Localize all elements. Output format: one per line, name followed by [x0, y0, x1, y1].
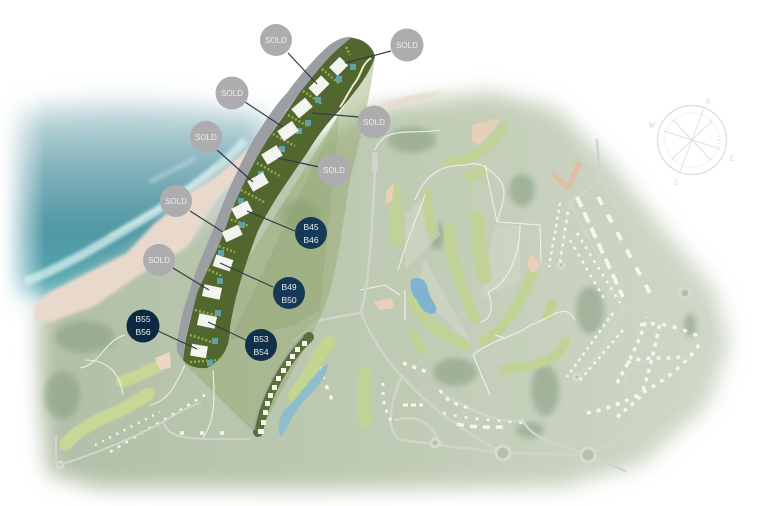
callout: B45 B46 [295, 217, 327, 249]
callout: SOLD 4: SOLD [363, 118, 385, 127]
callout leader lines [158, 51, 391, 349]
lower fairway and lake [280, 342, 329, 434]
beach north of the strip [365, 92, 445, 114]
callout: SOLD 6: SOLD [323, 166, 345, 175]
roads [56, 403, 250, 465]
cart paths [360, 130, 575, 395]
villas [190, 57, 348, 358]
icon: compass rose: E [729, 154, 735, 163]
villas [95, 197, 700, 452]
surf foam [25, 140, 245, 282]
callout: SOLD 4 [358, 106, 390, 138]
callout: B49 B50: B50 [281, 295, 297, 305]
sand bunkers [374, 118, 539, 310]
icon: compass rose: W [649, 121, 657, 130]
callout: SOLD 8: SOLD [148, 256, 170, 265]
callout: SOLD 7: SOLD [165, 197, 187, 206]
callout: SOLD 2: SOLD [396, 41, 418, 50]
roundabouts [57, 262, 690, 468]
callout: B55 B56: B56 [135, 327, 151, 337]
strip road [254, 336, 303, 430]
fairways [66, 367, 158, 444]
ocean [0, 90, 270, 310]
tree clusters [44, 127, 696, 438]
callout: SOLD 1 [260, 24, 292, 56]
dark green plot [183, 38, 375, 368]
callout: B49 B50 [273, 277, 305, 309]
lake [410, 278, 436, 314]
resort roads [295, 140, 710, 471]
golf fairways [363, 128, 565, 422]
development strip [177, 37, 375, 368]
callout: B45 B46: B46 [303, 235, 319, 245]
icon: compass rose: S [674, 178, 678, 187]
callout: B45 B46: B45 [303, 222, 319, 232]
strip villas [258, 341, 307, 434]
cart paths [80, 335, 214, 438]
villa pools [207, 64, 356, 366]
callout: SOLD 8 [143, 244, 175, 276]
translucent viewing fan over development [183, 57, 375, 436]
cream path [340, 58, 371, 107]
callout: SOLD 5 [190, 121, 222, 153]
lower left golf course [56, 335, 250, 465]
villa gardens [190, 47, 350, 362]
callout: B53 B54: B54 [253, 347, 269, 357]
callout: B53 B54 [245, 329, 277, 361]
right side resort [44, 118, 710, 471]
translucent golf corridors [405, 190, 520, 345]
icon: compass rose [649, 97, 735, 187]
callout: SOLD 2 [390, 28, 424, 62]
inner fan shade [230, 110, 340, 340]
hotel [552, 161, 582, 190]
dark green villa strip [258, 337, 309, 432]
icon: compass rose: N [704, 97, 711, 106]
callout: B55 B56: B55 [135, 314, 151, 324]
callout: SOLD 3 [216, 76, 248, 110]
callout: SOLD 3: SOLD [221, 89, 243, 98]
callout: B49 B50: B49 [281, 282, 297, 292]
callout: B53 B54: B53 [253, 334, 269, 344]
lower strip [254, 336, 329, 434]
callout: SOLD 5: SOLD [195, 133, 217, 142]
callout: SOLD 7 [160, 185, 192, 217]
beach [34, 145, 252, 322]
callout: SOLD 6 [318, 154, 350, 186]
grey access road [177, 37, 352, 360]
callout: B55 B56 [126, 310, 160, 342]
land mass [38, 92, 730, 490]
bunker [155, 352, 171, 370]
callout: SOLD 1: SOLD [265, 36, 287, 45]
